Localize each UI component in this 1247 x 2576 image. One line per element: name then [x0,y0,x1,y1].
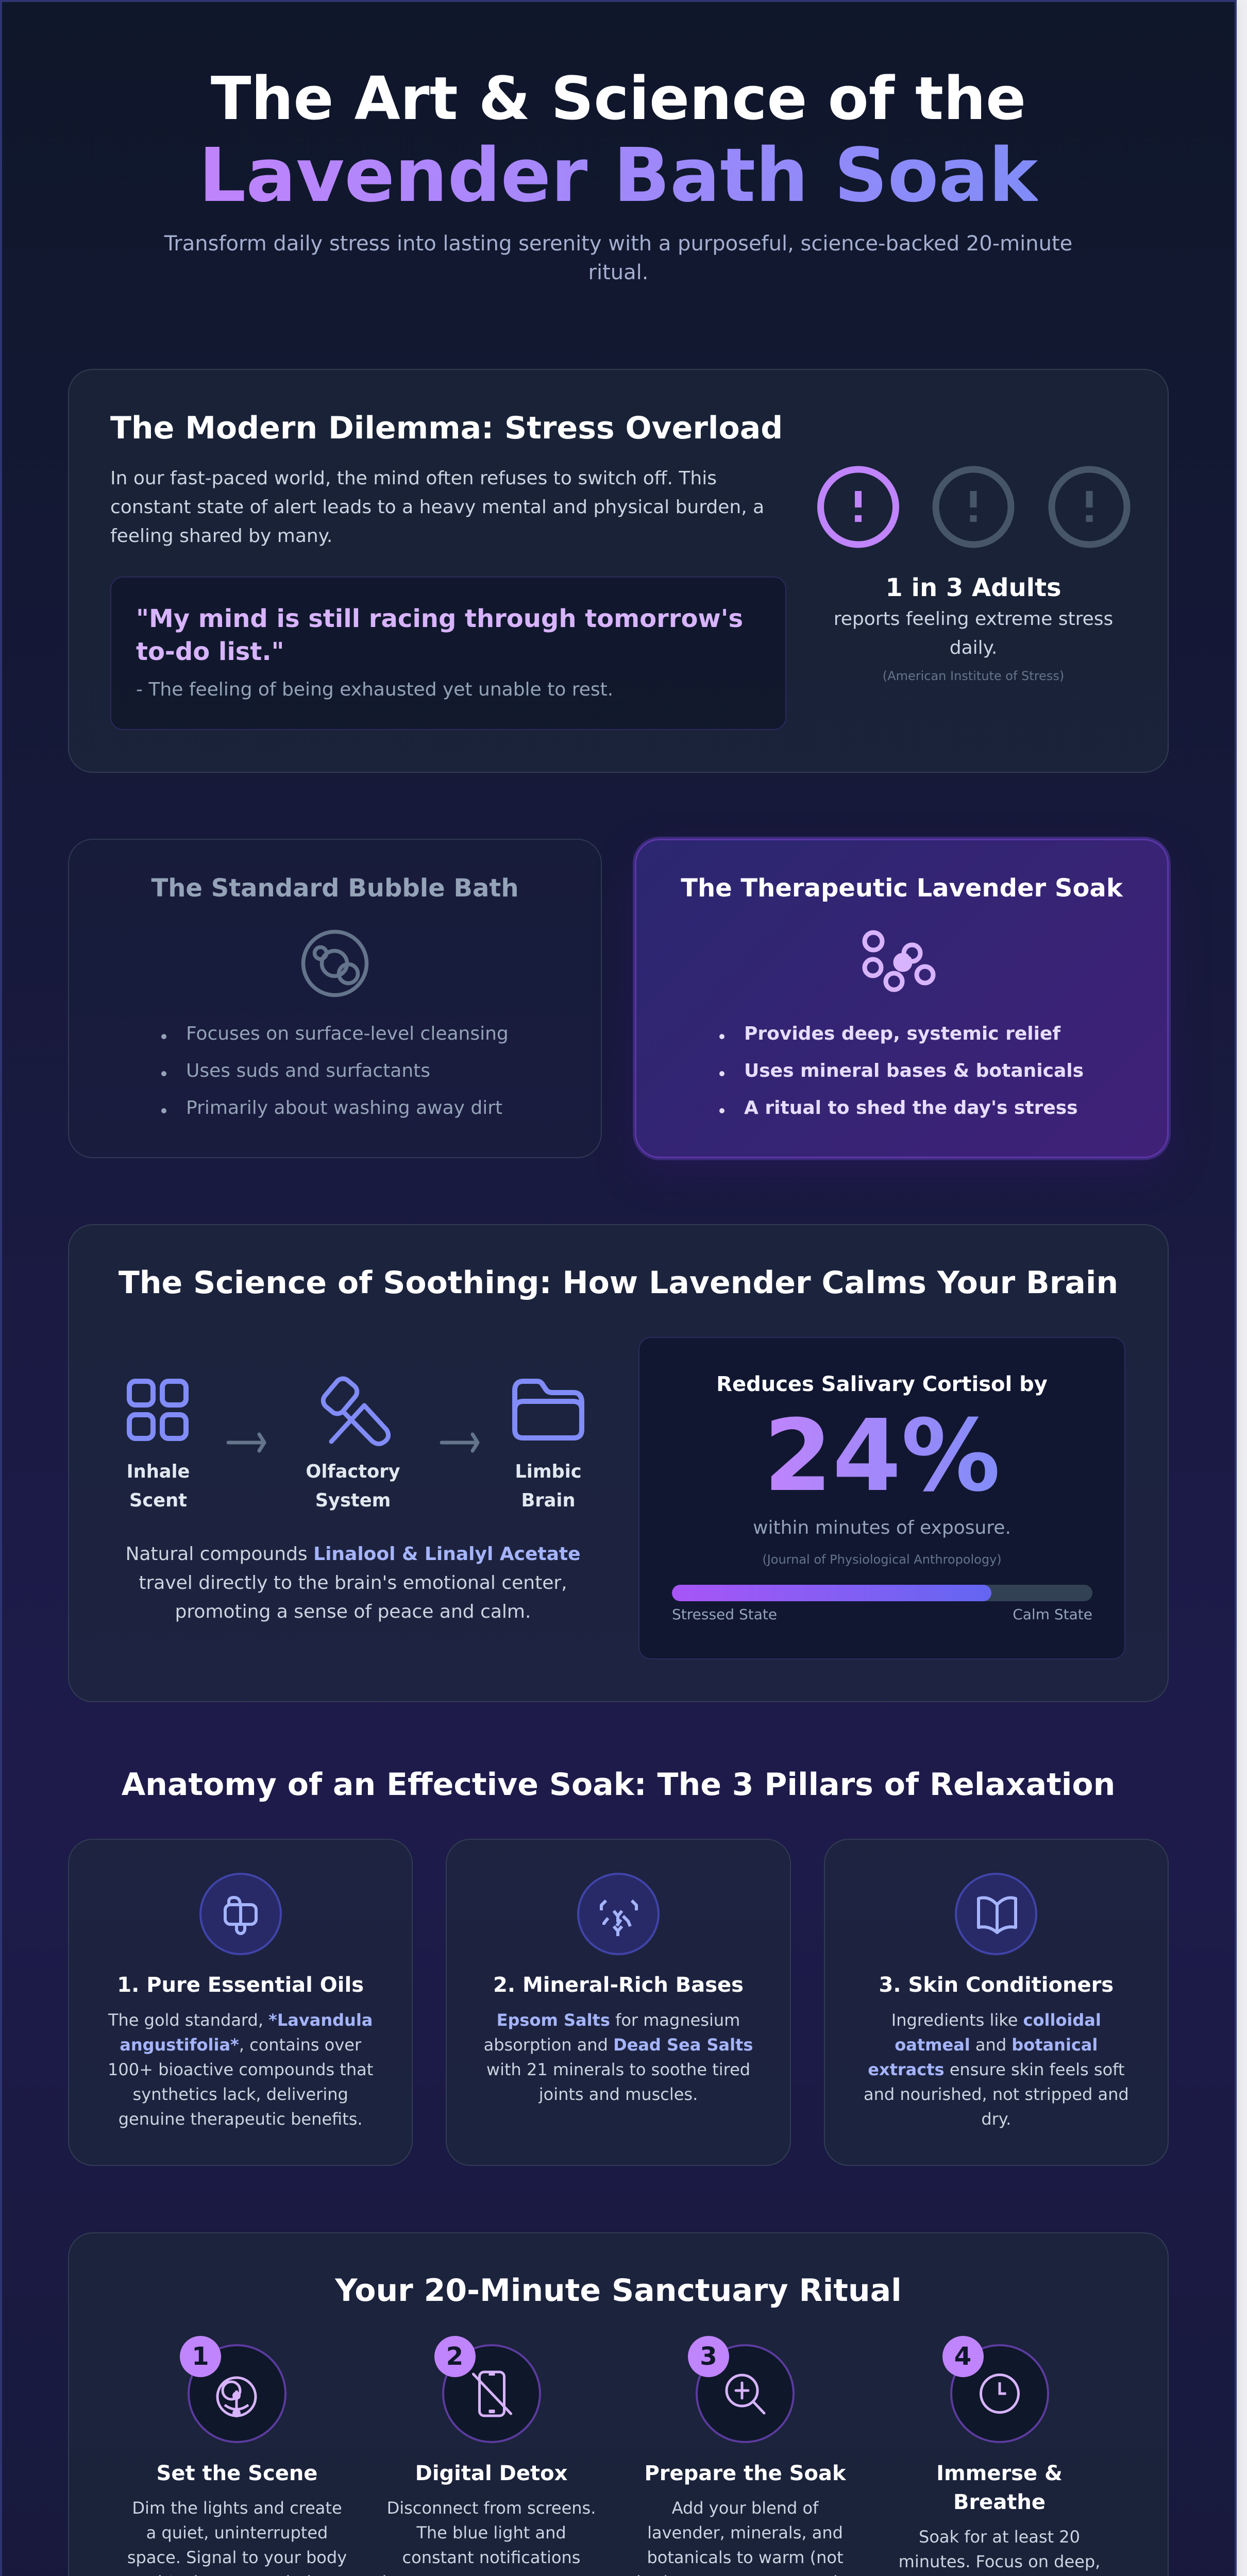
label: limbic brain [486,1458,610,1515]
step number: 4 [954,2342,971,2371]
pillar title: 1. Pure Essential Oils [117,1973,364,1997]
panel: standard bubble bath [68,839,602,1158]
step title [876,2459,1123,2517]
pillar title: 2. Mineral-Rich Bases [493,1973,744,1997]
icon: mineral crystals [577,1873,660,1955]
pillar text: angustifolia*, contains over [120,2035,361,2055]
stat number: 1 in 3 Adults [885,573,1061,602]
step text: a quiet, uninterrupted [146,2522,328,2542]
icon: bubbles in circle [301,929,369,997]
step title: Breathe [953,2490,1046,2514]
icon: three alert circles [817,466,1131,548]
list: standard bath features: Primarily about washing away dirt [186,1097,502,1118]
step text: Disconnect from screens. [387,2498,596,2517]
label: limbic brain: Brain [521,1490,576,1511]
step title: Immerse & [936,2462,1063,2485]
quote text: "My mind is still racing through tomorrow's [136,604,743,633]
title line 1: The Art & Science of the [211,64,1026,133]
pillar text: extracts ensure skin feels soft [868,2060,1124,2079]
stat source: (American Institute of Stress) [883,669,1064,683]
heading: sanctuary ritual: Your 20-Minute Sanctuary Ritual [335,2273,902,2309]
pillar text: Ingredients like colloidal [891,2010,1101,2030]
step text: constant notifications [402,2547,580,2567]
step number: 2 [446,2342,463,2371]
stat source: (Journal of Physiological Anthropology) [762,1552,1002,1567]
text block: dilemma intro: constant state of alert leads to a heavy mental and physical burden, a [110,497,764,517]
pillar text: and nourished, not stripped and [864,2084,1129,2104]
title line 2 gradient: Lavender Bath Soak [199,132,1038,218]
subtitle: Transform daily stress into lasting serenity with a purposeful, science-backed 20-minute [164,232,1072,256]
panel: the modern dilemma [68,369,1169,773]
pillar text: synthetics lack, delivering [133,2084,348,2104]
heading: modern dilemma: The Modern Dilemma: Stress Overload [110,410,783,446]
step text: Soak for at least 20 [919,2527,1080,2546]
stat description: reports feeling extreme stress [834,608,1113,630]
step circle with icon: clock [950,2344,1049,2443]
label: inhale scent: Scent [129,1490,187,1511]
pillar text: genuine therapeutic benefits. [119,2109,363,2129]
pillar title: 3. Skin Conditioners [879,1973,1114,1997]
step circle with icon: phone off [442,2344,541,2443]
flow: scent pathway [127,1377,584,1511]
quote text: to-do list." [136,637,284,666]
subtitle [164,232,1072,284]
list: standard bath features [161,1023,509,1118]
progress fill [672,1585,991,1601]
subtitle: ritual. [588,261,648,284]
stat heading: Reduces Salivary Cortisol by [716,1372,1048,1396]
step number [180,2336,221,2377]
panel: pillar 2 mineral bases [446,1839,791,2166]
label: olfactory system: System [315,1490,391,1511]
panel: pillar 1 essential oils [68,1839,413,2166]
pillar text: absorption and Dead Sea Salts [484,2035,753,2055]
text block: dilemma intro [110,468,764,546]
list: standard bath features: Uses suds and surfactants [186,1060,430,1081]
text block: lavender compounds: travel directly to the brain's emotional center, [139,1572,567,1594]
panel: therapeutic lavender soak [635,839,1169,1158]
pillar text: 100+ bioactive compounds that [108,2060,373,2079]
icon: inhale scent grid [127,1379,189,1441]
step circle with icon: magnifier [696,2344,795,2443]
arrow 2 [440,1432,484,1455]
text block: dilemma intro: In our fast-paced world, the mind often refuses to switch off. This [110,468,717,488]
label: limbic brain: Limbic [515,1461,582,1482]
step number [942,2336,983,2377]
list: lavender soak benefits: Uses mineral bases & botanicals [744,1060,1084,1081]
step text [876,2524,1123,2576]
pillar text: Epsom Salts for magnesium [497,2010,740,2030]
label: inhale scent [96,1458,220,1515]
heading: science of soothing: The Science of Soothing: How Lavender Calms Your Brain [119,1265,1118,1301]
icon: open book [955,1873,1037,1955]
icon: scattered bubbles [863,930,936,992]
step text: botanicals to warm (not [647,2547,844,2567]
quote caption: - The feeling of being exhausted yet unable to rest. [136,679,613,700]
header [164,64,1072,284]
step text: lavender, minerals, and [647,2522,843,2542]
label: stressed state: Stressed State [672,1606,777,1623]
step number [434,2336,475,2377]
step title: Prepare the Soak [644,2462,846,2485]
step text: minutes. Focus on deep, [899,2551,1100,2571]
icon: olfactory system [319,1376,392,1453]
callout: quote box [110,577,786,730]
text block: lavender compounds: promoting a sense of peace and calm. [175,1601,531,1622]
stat description [834,608,1113,658]
step text: Add your blend of [672,2498,818,2517]
step 2 [368,2334,615,2576]
label: inhale scent: Inhale [127,1461,190,1482]
step number: 3 [700,2342,717,2371]
list: standard bath features: Focuses on surface-level cleansing [186,1023,509,1044]
pillar text: oatmeal and botanical [895,2035,1098,2055]
step circle with icon: set the scene [188,2344,287,2443]
pillar text: with 21 minerals to soothe tired [486,2060,750,2079]
icon: limbic brain folder [510,1376,587,1443]
label: calm state: Calm State [1013,1606,1092,1623]
step text: space. Signal to your body [127,2547,347,2567]
pillar text: The gold standard, *Lavandula [108,2010,373,2030]
pillar text [68,2007,413,2131]
heading: standard bubble bath: The Standard Bubble Bath [151,874,519,903]
pillar text: joints and muscles. [539,2084,698,2104]
step text: Dim the lights and create [132,2498,342,2517]
step number: 1 [192,2342,209,2371]
step 1 [113,2334,361,2576]
panel: pillar 3 skin conditioners [824,1839,1169,2166]
step title: Set the Scene [157,2462,317,2485]
panel: sanctuary ritual [68,2232,1169,2576]
arrow 1 [227,1432,271,1455]
progress bar [672,1585,1092,1601]
step 4 [876,2334,1123,2576]
text block: lavender compounds: Natural compounds Linalool & Linalyl Acetate [125,1544,581,1564]
pillar text [446,2007,791,2106]
label: olfactory system: Olfactory [306,1461,400,1482]
panel: cortisol stat [638,1337,1125,1659]
text block: dilemma intro: feeling shared by many. [110,526,332,546]
panel: science of soothing [68,1224,1169,1702]
quote text [136,604,743,666]
step text [113,2496,361,2576]
step number [688,2336,729,2377]
step 3 [621,2334,869,2576]
step text [621,2496,869,2576]
step title: Digital Detox [415,2462,567,2485]
stat number 24 percent: 24% [764,1399,1000,1514]
pillar text [824,2007,1169,2131]
stat: 1 in 3 adults [817,466,1131,683]
step text: The blue light and [416,2522,566,2542]
label: olfactory system [291,1458,415,1515]
icon: oil bottle [199,1873,282,1955]
list: lavender soak benefits: Provides deep, systemic relief [744,1023,1060,1044]
pillar text: dry. [981,2109,1011,2129]
step text [368,2496,615,2576]
list: lavender soak benefits: A ritual to shed the day's stress [744,1097,1078,1118]
stat description: daily. [950,637,997,658]
list: lavender soak benefits [719,1023,1084,1118]
heading: therapeutic soak: The Therapeutic Lavender Soak [681,874,1123,903]
heading: anatomy: Anatomy of an Effective Soak: The 3 Pillars of Relaxation [122,1767,1115,1803]
stat caption: within minutes of exposure. [753,1517,1011,1538]
text block: lavender compounds [95,1539,611,1626]
